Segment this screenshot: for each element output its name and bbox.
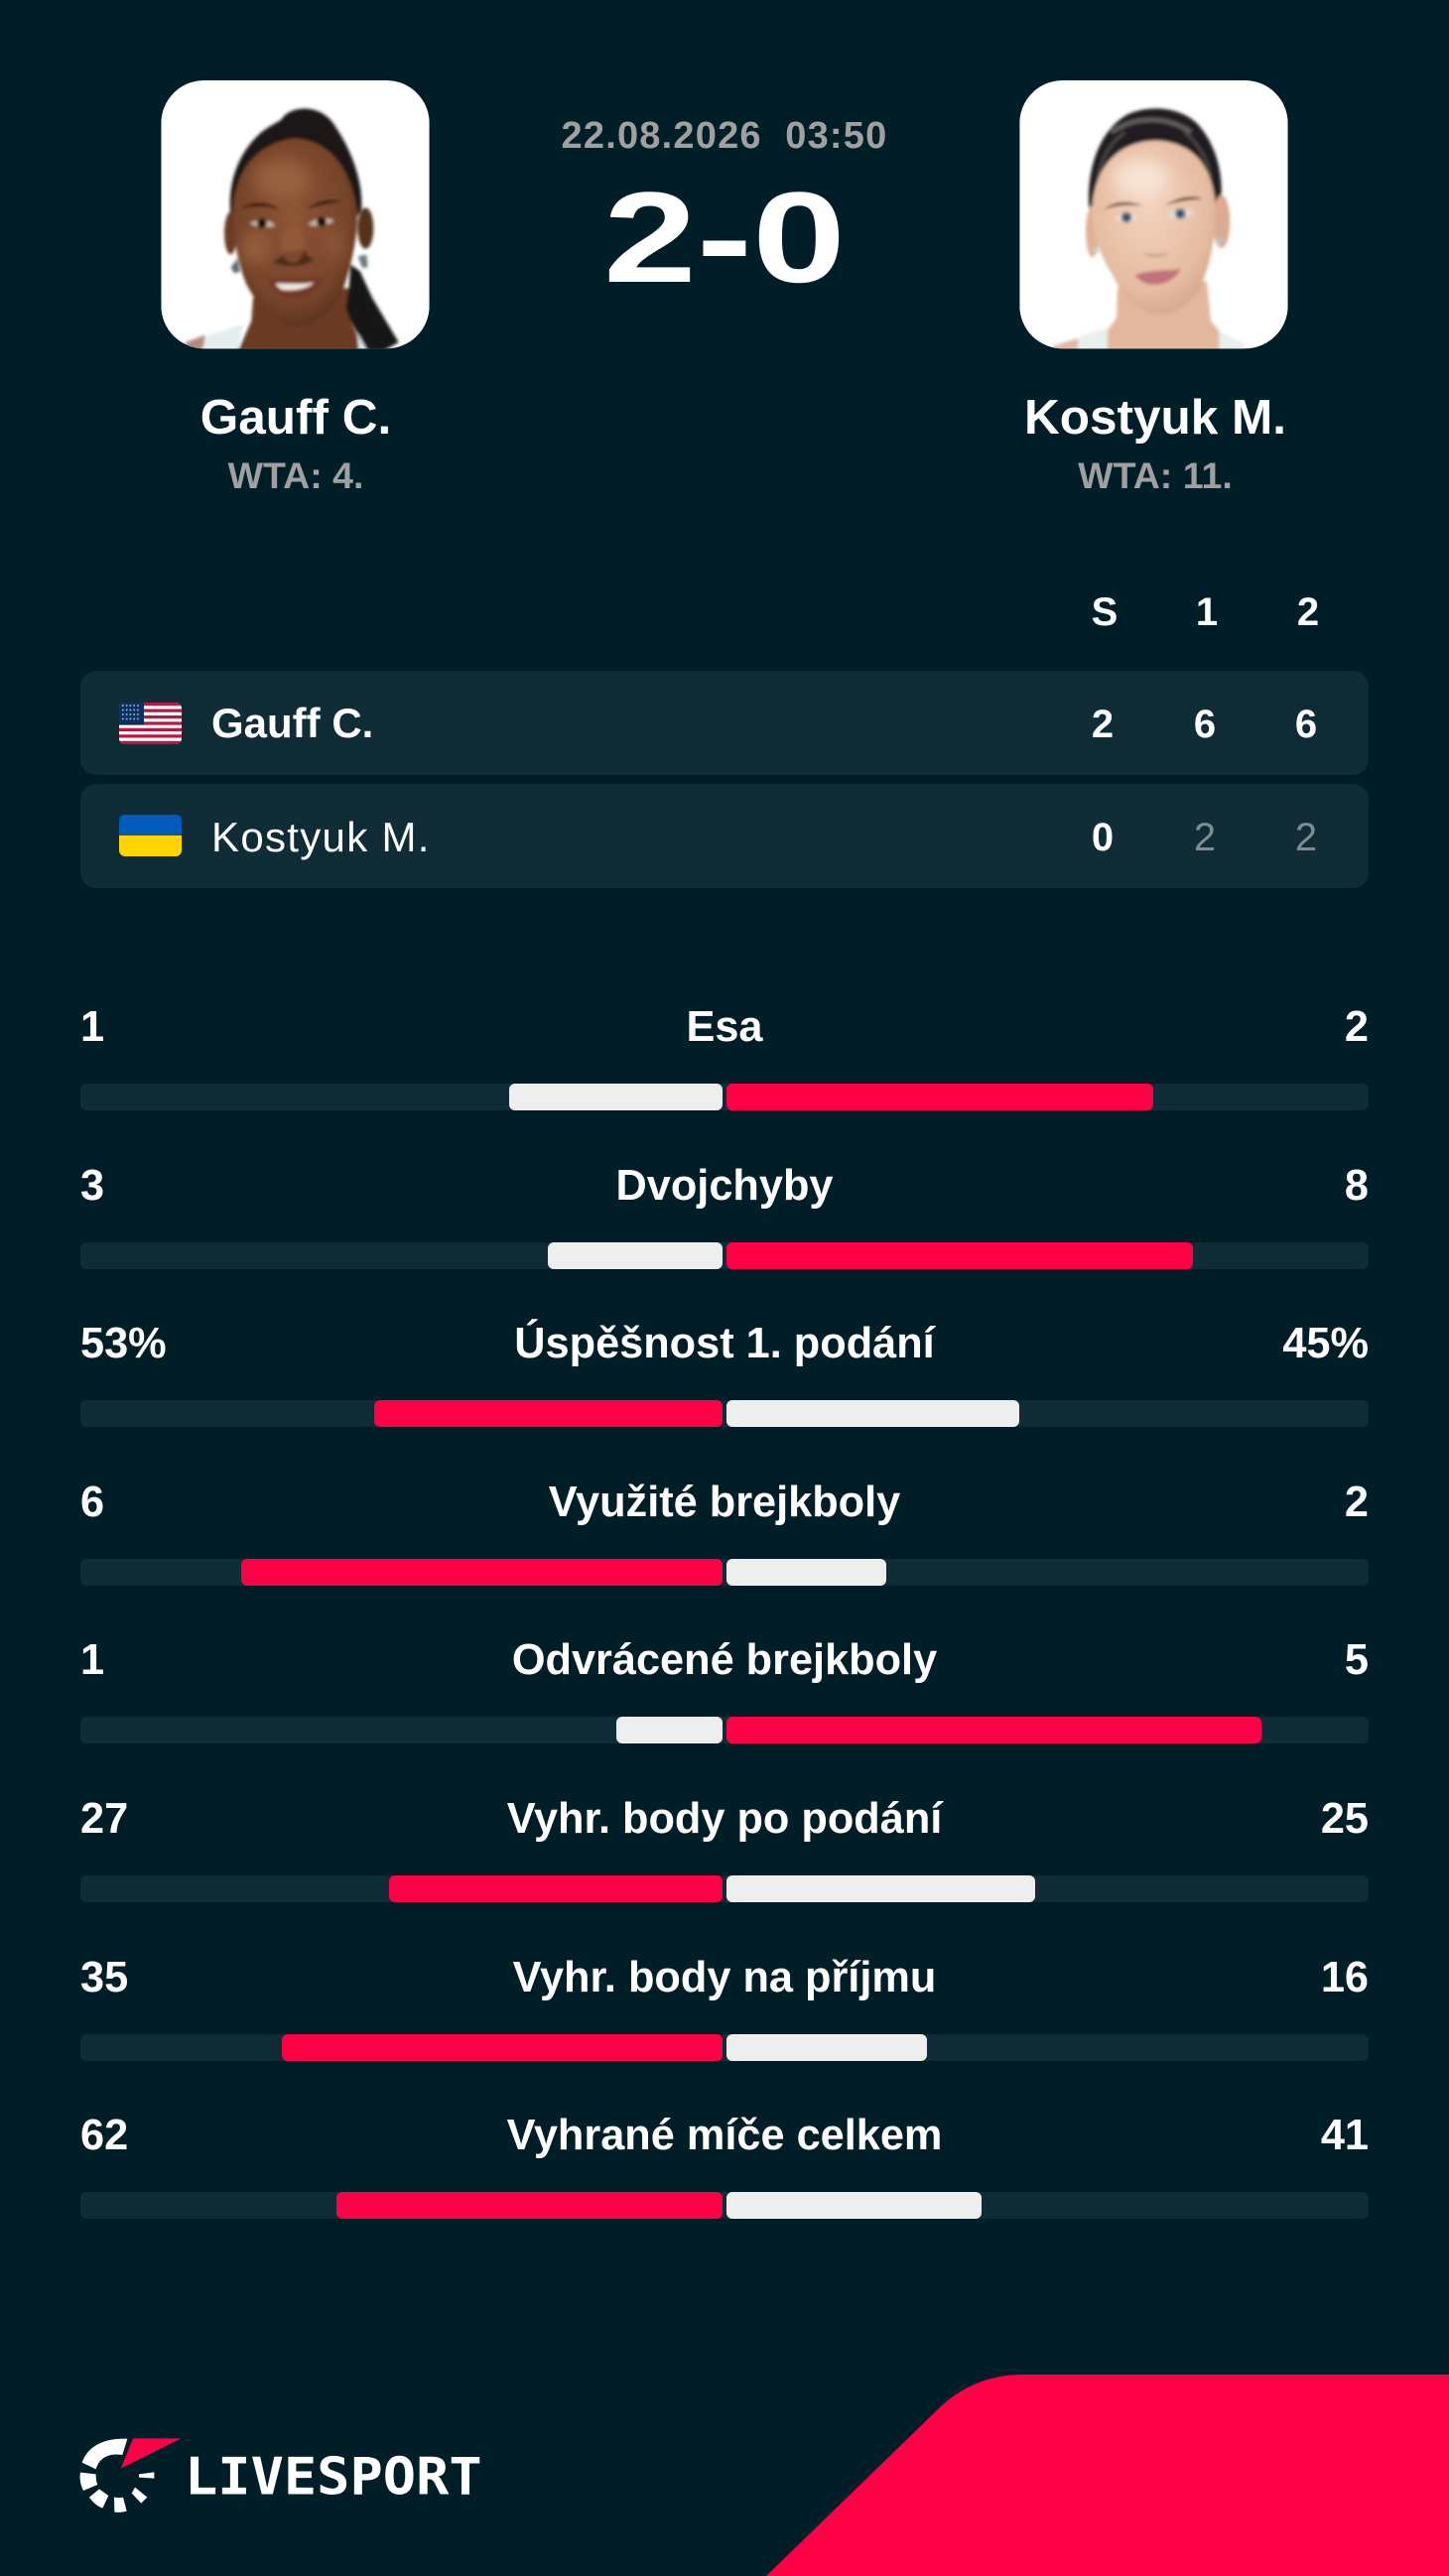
stat: Dvojchyby: 8 [1345,1162,1369,1210]
name: Kostyuk: Kostyuk M. [211,814,431,860]
stat: Úspěšnost 1. podání [80,1319,1369,1427]
stat: Esa: 2 [1345,1003,1369,1051]
stat: Esa [80,1003,1369,1110]
score row: Kostyuk [80,784,1369,888]
stat: Odvrácené brejkboly: 5 [1345,1636,1369,1684]
stat: Vyhr. body po podání: Vyhr. body po podání [507,1795,942,1843]
stat: Úspěšnost 1. podání: 45% [1282,1320,1369,1367]
stat: Využité brejkboly [80,1479,1369,1586]
sets won: Gauff: 2 [1092,703,1114,746]
player rank: Kostyuk: WTA: 11. [1078,454,1233,496]
name: Gauff: Gauff C. [211,700,373,746]
stat: Vyhr. body na příjmu: Vyhr. body na příjmu [513,1954,936,2001]
logo wordmark: LIVESPORT [185,2447,482,2507]
stat: Vyhrané míče celkem [80,2112,1369,2219]
stat: Vyhr. body po podání: 27 [80,1795,128,1843]
player photo: Gauff [161,80,430,349]
stat: Dvojchyby: Dvojchyby [616,1162,833,1210]
stat: Vyhr. body na příjmu [80,1954,1369,2061]
flag: USA [119,703,182,744]
player name: Kostyuk: Kostyuk M. [1024,390,1286,445]
set header: 1: 1 [1196,590,1218,634]
stat: Úspěšnost 1. podání: Úspěšnost 1. podání [514,1320,935,1367]
logo: Livesport [79,2438,482,2512]
date and time: 22.08.2026 03:50 [562,115,887,157]
stat: Úspěšnost 1. podání: 53% [80,1320,167,1367]
stat: Dvojchyby [80,1162,1369,1269]
stat: Esa: Esa [686,1003,763,1051]
stat: Vyhrané míče celkem: 62 [80,2112,128,2159]
set 1: Kostyuk: 2 [1194,816,1216,859]
stat: Vyhr. body na příjmu: 35 [80,1954,128,2001]
stat: Odvrácené brejkboly: Odvrácené brejkboly [512,1636,937,1684]
flag: Ukraine [119,815,182,856]
stat: Vyhr. body po podání [80,1795,1369,1902]
stat: Využité brejkboly: 2 [1345,1479,1369,1526]
sets won: Kostyuk: 0 [1092,816,1114,859]
stat: Využité brejkboly: 6 [80,1479,104,1526]
stat: Vyhrané míče celkem: 41 [1321,2112,1369,2159]
score row: Gauff [80,671,1369,775]
set 2: Gauff: 6 [1295,703,1317,746]
set 1: Gauff: 6 [1194,703,1216,746]
set header: S: S [1092,590,1118,634]
logo mark [80,2438,181,2512]
stat: Odvrácené brejkboly [80,1636,1369,1743]
player photo: Kostyuk [1019,80,1288,349]
stat: Vyhrané míče celkem: Vyhrané míče celkem [507,2112,942,2159]
stat: Využité brejkboly: Využité brejkboly [549,1479,900,1526]
stat: Dvojchyby: 3 [80,1162,104,1210]
player name: Gauff: Gauff C. [200,390,391,445]
stat: Vyhr. body na příjmu: 16 [1321,1954,1369,2001]
player rank: Gauff: WTA: 4. [228,454,363,496]
stat: Esa: 1 [80,1003,104,1051]
stat: Vyhr. body po podání: 25 [1321,1795,1369,1843]
stat: Odvrácené brejkboly: 1 [80,1636,104,1684]
set header: 2: 2 [1297,590,1319,634]
set 2: Kostyuk: 2 [1295,816,1317,859]
